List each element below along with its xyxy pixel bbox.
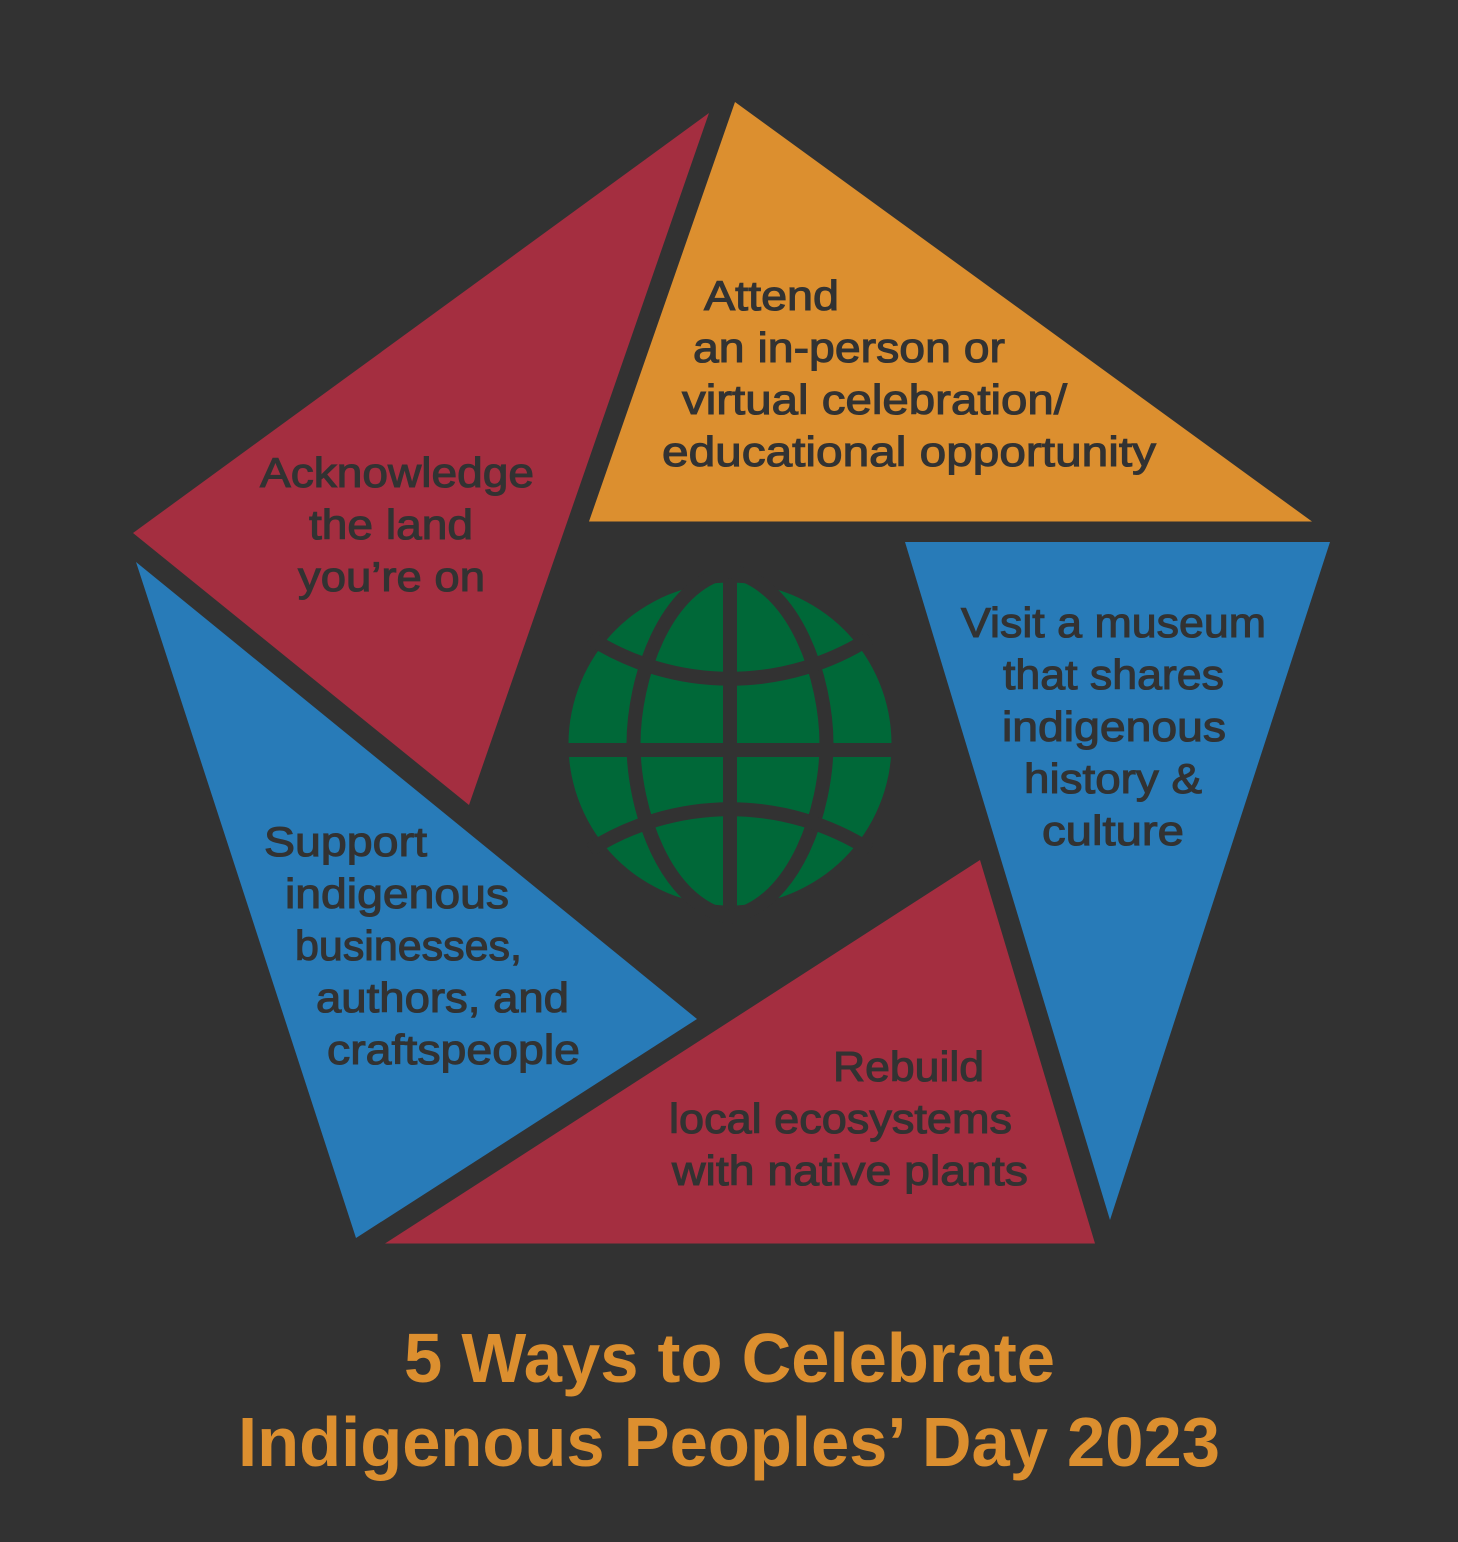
panel: visit a museum: [905, 542, 1330, 1220]
panel: attend a celebration: [589, 102, 1312, 522]
panel: acknowledge the land: the land: [309, 501, 473, 548]
panel: rebuild local ecosystems: [385, 860, 1095, 1244]
panel: visit a museum: indigenous: [1002, 703, 1226, 750]
panel: support indigenous businesses: indigenous: [285, 870, 509, 917]
icon: globe: [560, 571, 900, 917]
panel: support indigenous businesses: [136, 562, 697, 1238]
panel: support indigenous businesses: Support: [264, 818, 427, 865]
panel: support indigenous businesses: craftspeople: [327, 1026, 580, 1073]
panel: acknowledge the land: you’re on: [298, 553, 485, 600]
title: [238, 1319, 1220, 1481]
panel: visit a museum: Visit a museum: [961, 599, 1266, 646]
panel: rebuild local ecosystems: with native plants: [671, 1147, 1028, 1194]
title: Indigenous Peoples’ Day 2023: [238, 1403, 1220, 1481]
panel: attend a celebration: an in-person or: [693, 324, 1005, 371]
panel: acknowledge the land: Acknowledge: [260, 449, 534, 496]
panel: visit a museum: that shares: [1003, 651, 1224, 698]
panel: visit a museum: culture: [1042, 807, 1184, 854]
panel: attend a celebration: Attend: [704, 272, 839, 319]
panel: attend a celebration: educational opportunity: [662, 428, 1156, 475]
panel: rebuild local ecosystems: Rebuild: [833, 1043, 984, 1090]
panel: rebuild local ecosystems: local ecosystems: [669, 1095, 1012, 1142]
panel: attend a celebration: virtual celebration/: [682, 376, 1067, 423]
panel: support indigenous businesses: businesses,: [295, 922, 522, 969]
panel: acknowledge the land: [133, 113, 709, 805]
panel: visit a museum: history &: [1024, 755, 1202, 802]
panel: support indigenous businesses: authors, and: [316, 974, 569, 1021]
title: 5 Ways to Celebrate: [404, 1319, 1055, 1397]
